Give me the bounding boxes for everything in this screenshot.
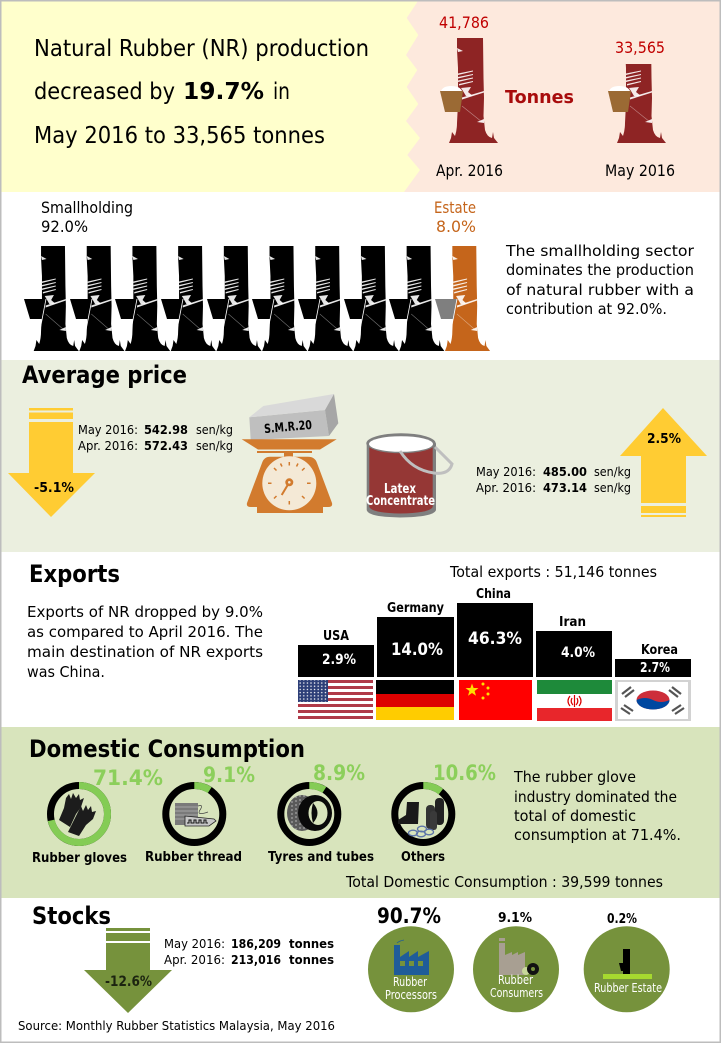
export bar: China: 46.3% (468, 629, 522, 649)
stocks holder: rubber estate: Rubber Estate (594, 981, 662, 995)
stocks holder: rubber processors (368, 904, 454, 1012)
text: stock levels: 186,209 (231, 936, 281, 951)
flag: South Korea (615, 680, 691, 721)
stocks holder: rubber consumers: Consumers (490, 986, 543, 1000)
icon: blue factory (394, 940, 429, 975)
text: exports summary (27, 603, 263, 681)
icon: tree on grass (603, 949, 652, 979)
headline: in (273, 77, 290, 105)
text: SMR 20 prices: May 2016: (78, 422, 138, 437)
heading: stocks: Stocks (32, 902, 111, 930)
text: stock levels: tonnes (289, 936, 334, 951)
stocks holder: rubber consumers: 9.1% (498, 911, 532, 926)
icon: scale with S.M.R.20 block: S.M.R.20 (263, 417, 313, 436)
production comparison: April 2016: 41,786 (439, 13, 489, 32)
production comparison: May 2016 (605, 38, 675, 180)
production comparison: April 2016: Apr. 2016 (436, 161, 503, 180)
production comparison: May 2016: 33,565 (615, 38, 665, 57)
headline: decreased by (34, 77, 175, 105)
text: exports summary: main destination of NR exports (27, 643, 263, 661)
export bar: Germany (377, 601, 454, 677)
arrow: SMR 20 price down (8, 408, 95, 517)
text: SMR 20 prices (78, 422, 233, 453)
arrow: latex price up (620, 408, 707, 517)
flag: USA (298, 680, 373, 720)
ring: rubber gloves: 71.4% (93, 766, 163, 790)
icon: boot, rollers and rings (398, 798, 444, 837)
export bar: USA: USA (323, 629, 349, 644)
total exports: Total exports : 51,146 tonnes (449, 563, 657, 581)
icon: gloves (59, 793, 96, 836)
text: exports summary: as compared to April 2016. The (27, 623, 263, 641)
headline: Natural Rubber (NR) production (34, 34, 369, 62)
text: stock levels (164, 936, 334, 967)
export bar: USA (298, 629, 374, 677)
text: smallholding sector: The smallholding sector (505, 242, 695, 260)
arrow: stocks down (84, 928, 172, 1013)
heading: exports: Exports (29, 560, 120, 588)
text: SMR 20 prices: 572.43 (144, 438, 188, 453)
text: smallholding sector: contribution at 92.0%. (506, 300, 667, 318)
stocks holder: rubber processors: Rubber (393, 975, 427, 989)
text: SMR 20 prices: sen/kg (196, 422, 233, 437)
arrow: SMR 20 price down: -5.1% (34, 481, 74, 496)
icon: tyres (287, 795, 332, 831)
export bar: Korea: Korea (641, 643, 678, 658)
arrow: stocks down: -12.6% (105, 974, 152, 990)
estate label (434, 198, 476, 236)
text: stock levels: May 2016: (164, 936, 225, 951)
text: latex concentrate prices (476, 464, 631, 495)
stocks holder: rubber estate: 0.2% (607, 912, 637, 927)
text: stock levels: 213,016 (231, 952, 281, 967)
total domestic consumption: Total Domestic Consumption : 39,599 tonnes (345, 873, 663, 891)
text: SMR 20 prices: 542.98 (144, 422, 188, 437)
export bar: Germany: 14.0% (391, 640, 443, 660)
ring: rubber thread: 9.1% (203, 763, 255, 787)
text: smallholding sector (505, 242, 695, 318)
text: stock levels: tonnes (289, 952, 334, 967)
ring: rubber thread (145, 763, 255, 865)
smallholding label: Smallholding (41, 198, 133, 217)
export bar: Korea: 2.7% (640, 661, 670, 676)
smallholding label (41, 198, 133, 236)
ring: others: 10.6% (433, 761, 496, 785)
icon: scale with S.M.R.20 block (242, 394, 338, 513)
flag: Germany (376, 680, 454, 720)
stocks holder: rubber processors: Processors (385, 988, 437, 1002)
stocks holder: rubber estate (584, 912, 670, 1012)
text: latex concentrate prices: sen/kg (594, 480, 631, 495)
icon: grey factory with tyre (499, 938, 539, 975)
export bar: China (457, 587, 533, 677)
text: domestic consumption summary: total of domestic (514, 807, 636, 825)
icon: thread spool and machine (175, 803, 216, 826)
headline (34, 34, 369, 149)
smallholding label: 92.0% (41, 217, 88, 236)
flag: Iran (537, 680, 612, 721)
text: latex concentrate prices: 473.14 (543, 480, 587, 495)
text: SMR 20 prices: sen/kg (196, 438, 233, 453)
arrow: latex price up: 2.5% (647, 432, 681, 447)
ring: rubber gloves: Rubber gloves (32, 851, 127, 866)
ring: rubber gloves (32, 766, 163, 866)
text: stock levels: Apr. 2016: (164, 952, 225, 967)
ring: rubber thread: Rubber thread (145, 850, 242, 865)
text: SMR 20 prices: Apr. 2016: (78, 438, 138, 453)
ring: tyres and tubes (268, 761, 374, 865)
headline: May 2016 to 33,565 tonnes (34, 121, 325, 149)
icon: latex concentrate bucket (366, 433, 452, 518)
ring: tyres and tubes: Tyres and tubes (268, 850, 374, 865)
text: exports summary: was China. (27, 663, 105, 681)
text: domestic consumption summary: The rubber glove (513, 768, 636, 786)
unit label: tonnes: Tonnes (505, 87, 574, 108)
text: smallholding sector: dominates the production (506, 261, 694, 279)
heading: domestic consumption: Domestic Consumption (29, 735, 305, 763)
export bar: Iran: 4.0% (561, 645, 595, 661)
stocks holder: rubber consumers: Rubber (498, 973, 533, 987)
text: latex concentrate prices: 485.00 (543, 464, 587, 479)
text: exports summary: Exports of NR dropped by 9.0% (27, 603, 263, 621)
icon: latex concentrate bucket: Latex (384, 482, 416, 497)
flag: China (459, 680, 532, 720)
export bar: Iran: Iran (559, 615, 586, 630)
text: smallholding sector: of natural rubber with a (506, 281, 694, 299)
text: latex concentrate prices: May 2016: (476, 464, 536, 479)
source note: Source: Monthly Rubber Statistics Malaysia, May 2016 (18, 1018, 335, 1033)
heading: average price: Average price (22, 361, 187, 389)
estate label: 8.0% (436, 217, 476, 236)
export bar: Germany: Germany (387, 601, 444, 616)
stocks holder: rubber processors: 90.7% (377, 904, 441, 928)
headline: 19.7% (183, 77, 264, 105)
export bar: Korea (615, 643, 691, 677)
production comparison: May 2016: May 2016 (605, 161, 675, 180)
text: domestic consumption summary: consumption at 71.4%. (514, 826, 681, 844)
ring: others: Others (401, 850, 445, 865)
export bar: China: China (476, 587, 511, 602)
estate label: Estate (434, 198, 476, 217)
icon: latex concentrate bucket: Concentrate (366, 494, 435, 509)
text: latex concentrate prices: Apr. 2016: (476, 480, 536, 495)
ring: tyres and tubes: 8.9% (313, 761, 365, 785)
export bar: Iran (536, 615, 612, 677)
production comparison: April 2016 (436, 13, 503, 180)
text: domestic consumption summary: industry dominated the (514, 788, 677, 806)
text: latex concentrate prices: sen/kg (594, 464, 631, 479)
text: domestic consumption summary (513, 768, 681, 844)
stocks holder: rubber consumers (473, 911, 559, 1012)
pictogram: smallholding versus estate trees (24, 246, 490, 351)
ring: others (395, 761, 496, 865)
export bar: USA: 2.9% (322, 652, 356, 668)
